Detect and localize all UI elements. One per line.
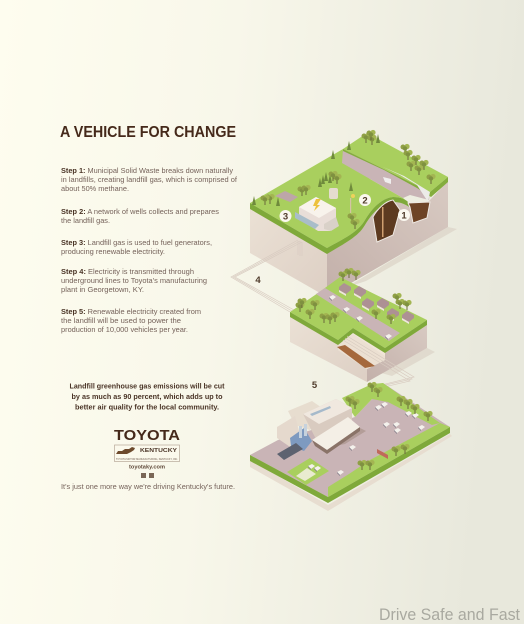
underground lines: step 5 [343,336,414,390]
step 5: the landfill will be used to power the [61,316,181,325]
callout: emissions [70,382,225,412]
number 3: 3 [283,212,288,222]
hill [343,133,448,192]
parking island [287,458,329,485]
isometric block: Toyota plant [250,382,452,511]
surface grass [290,277,427,348]
lawn green edge [250,197,409,254]
underground lines: step 4 [231,240,302,312]
step 3: producing renewable electricity. [61,247,165,256]
base underside [250,434,452,511]
logo: Toyota Kentucky: TOYOTA [114,428,181,444]
lot surface [250,383,450,497]
step 1 [61,166,238,193]
right face [367,325,427,382]
callout: emissions: better air quality for the local community. [75,402,219,412]
logo: Toyota Kentucky [114,428,181,478]
front grass strip [328,423,450,497]
soil layer [337,345,375,368]
sign [377,449,388,459]
houses [339,283,414,324]
number 1: 1 [401,210,407,222]
step 2: the landfill gas. [61,216,110,225]
left pit [373,200,400,242]
step 4 [61,267,207,294]
left face [290,315,367,382]
flare [350,198,351,213]
hill edge [343,149,448,197]
step 1: in landfills, creating landfill gas, which is comprised of [61,175,238,184]
ground shadow [345,227,457,288]
number 2 [359,194,371,206]
step 1: Step 1: Municipal Solid Waste breaks down naturally [61,166,233,175]
number 5: 5 [312,380,318,391]
right face [327,181,448,297]
step 2: Step 2: A network of wells collects and prepares [61,207,219,216]
left face [250,206,327,297]
notch floor [338,334,385,369]
number 2: 2 [362,196,368,206]
parked cars [308,402,425,476]
notch wall [353,332,385,360]
road [316,288,400,341]
grass edge [290,312,427,353]
text block: steps [61,166,238,334]
step 4: plant in Georgetown, KY. [61,285,144,294]
trees on landfill [252,130,436,229]
right pit [408,202,430,223]
lawn [250,149,408,248]
step 4: Step 4: Electricity is transmitted through [61,267,194,276]
block shadow [378,348,435,376]
step 5 [61,307,201,334]
step 4: underground lines to Toyota's manufacturing [61,276,207,285]
power plant building [295,197,339,231]
parking area [275,191,298,202]
step 3: Step 3: Landfill gas is used to fuel generators, [61,238,212,247]
left grass edge [250,455,328,503]
callout: emissions: by as much as 90 percent, which adds up to [72,392,223,401]
logo: Toyota Kentucky: KENTUCKY [140,448,178,454]
truck [383,177,391,184]
paved road wedge [342,149,430,200]
right grass edge [328,427,450,503]
number 4: 4 [255,275,261,286]
liner [383,167,430,202]
number 3 [280,210,292,222]
step 2 [61,207,219,225]
gas well [382,207,384,237]
trees [346,382,433,470]
step 1: about 50% methane. [61,184,129,193]
isometric block: landfill [250,130,457,297]
isometric block: neighborhood [290,268,435,382]
logo: Toyota Kentucky: TOYOTA MOTOR MANUFACTURING, KENTUCKY, INC. [116,457,178,461]
tagline: It's just one more way we're driving Kentucky's future. [61,482,235,491]
cars [329,295,392,340]
logo: Toyota Kentucky: toyotaky.com [129,464,165,470]
number 1 [398,209,410,222]
step 5: Step 5: Renewable electricity created from [61,307,201,316]
watermark: Drive Safe and Fast [379,606,520,624]
back lawn [342,383,440,425]
storage tank [329,188,338,199]
title: A VEHICLE FOR CHANGE [60,124,236,141]
callout: emissions: Landfill greenhouse gas emissions will be cut [70,382,225,390]
step 5: production of 10,000 vehicles per year. [61,325,188,334]
buildings [277,399,366,460]
trees [296,268,412,324]
step 3 [61,238,212,256]
